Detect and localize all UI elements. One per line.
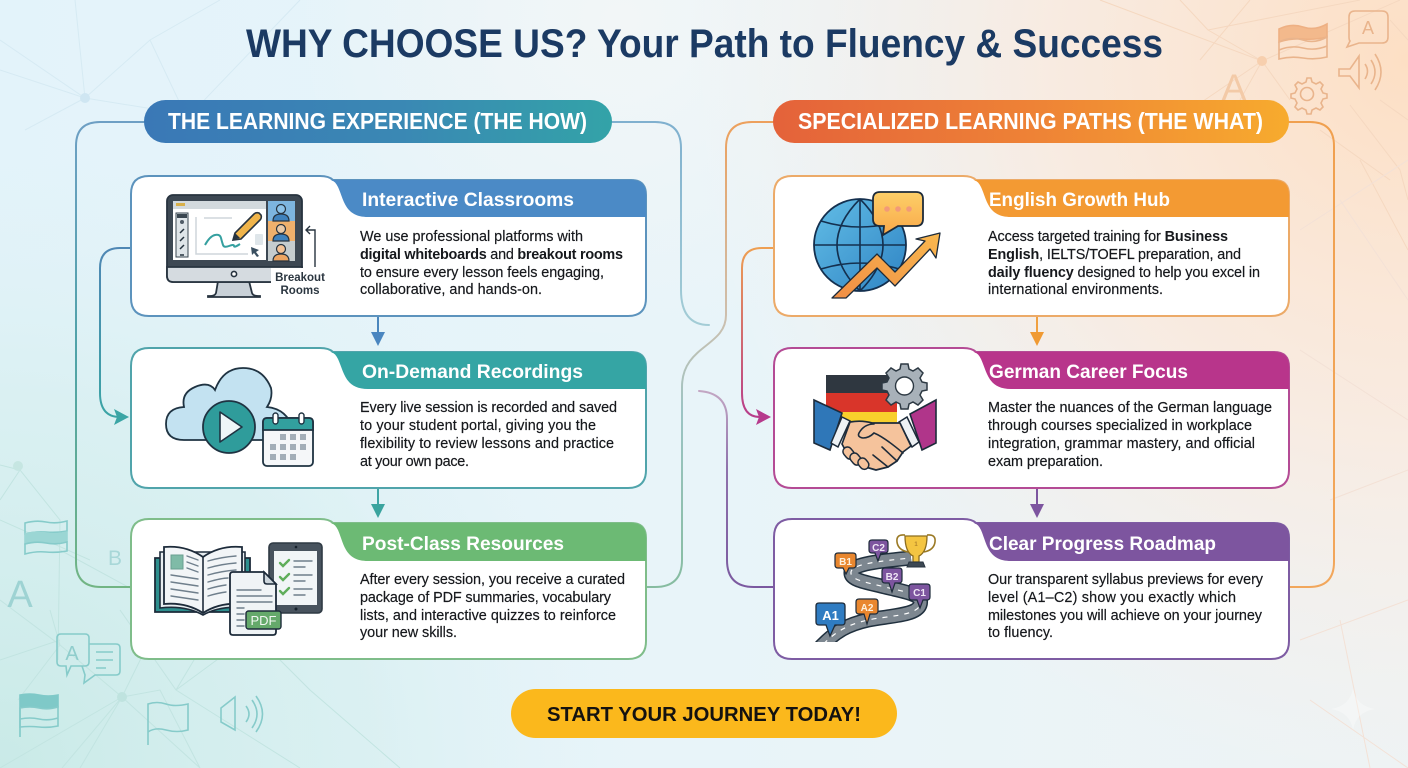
decorative language icons, top right [1222, 11, 1388, 114]
arrow: english hub to german focus [742, 248, 774, 425]
text block: Every live session is recorded and saved [360, 400, 617, 416]
text block: through courses specialized in workplace [988, 418, 1252, 434]
panel: german career focus [774, 348, 1289, 488]
call to action button [511, 689, 897, 738]
icon: winding road with level pins and trophy: C1 [913, 588, 926, 599]
icon: open book, tablet and PDF [155, 543, 322, 635]
icon: winding road with level pins and trophy [805, 535, 935, 657]
text block: Master the nuances of the German language [988, 400, 1272, 416]
icon: open book, tablet and PDF: PDF [250, 613, 277, 628]
arrow: right card 1 down [1030, 316, 1044, 346]
arrow: right card 2 down [1030, 488, 1044, 518]
decorative language icons, top right: A [1362, 18, 1374, 38]
arrow: card 2 down [371, 488, 385, 518]
heading: English Growth Hub [989, 189, 1170, 211]
icon: computer monitor with whiteboard: Breakout [275, 272, 325, 284]
left heading pill: THE LEARNING EXPERIENCE (THE HOW) [168, 108, 587, 134]
text block: your new skills. [360, 625, 457, 641]
icon: winding road with level pins and trophy: A1 [822, 608, 839, 623]
title: WHY CHOOSE US? Your Path to Fluency & Success [246, 22, 1163, 66]
panel: english growth hub [774, 176, 1289, 316]
text block [988, 229, 1260, 298]
icon: winding road with level pins and trophy: B2 [886, 572, 899, 583]
text block [360, 400, 617, 470]
icon: globe, speech bubble and growth arrow [814, 192, 940, 298]
arrow: interactive classrooms to recordings [100, 248, 131, 425]
heading: Post-Class Resources [362, 533, 564, 555]
icon: winding road with level pins and trophy: B1 [839, 557, 852, 568]
text block [360, 229, 623, 298]
text block: international environments. [988, 282, 1163, 298]
decorative language icons, bottom left: A [7, 574, 33, 616]
text block: package of PDF summaries, vocabulary [360, 590, 612, 606]
text block [360, 572, 625, 641]
text block: Our transparent syllabus previews for every [988, 572, 1264, 588]
icon: computer monitor with whiteboard: Rooms [281, 285, 319, 297]
text block: We use professional platforms with [360, 229, 583, 245]
icon: winding road with level pins and trophy: C2 [872, 543, 885, 554]
text block: to fluency. [988, 625, 1053, 641]
decorative language icons, bottom left: B [108, 547, 122, 570]
text block: milestones you will achieve on your journey [988, 608, 1263, 624]
text block [988, 400, 1272, 470]
decorative language icons, bottom left: A [65, 643, 79, 665]
text block: English, IELTS/TOEFL preparation, and [988, 247, 1241, 263]
text block: digital whiteboards and breakout rooms [360, 247, 623, 263]
connector: right outer bracket [1289, 122, 1334, 587]
heading: German Career Focus [989, 361, 1188, 383]
icon: computer monitor with whiteboard [167, 195, 329, 298]
text block: lists, and interactive quizzes to reinforce [360, 608, 616, 624]
call to action button: START YOUR JOURNEY TODAY! [547, 704, 861, 726]
text block: level (A1–C2) show you exactly which [988, 590, 1236, 606]
icon: cloud, play button and calendar [166, 368, 313, 466]
text block: Access targeted training for Business [988, 229, 1228, 245]
panel: on-demand recordings [131, 348, 646, 488]
connector: left pill to centre [612, 122, 709, 325]
panel: interactive classrooms [131, 176, 646, 316]
text block [988, 572, 1264, 641]
icon: German flag, gear and handshake [814, 364, 936, 471]
left heading pill [144, 100, 612, 143]
right heading pill: SPECIALIZED LEARNING PATHS (THE WHAT) [798, 108, 1263, 134]
text block: collaborative, and hands-on. [360, 282, 542, 298]
text block: daily fluency designed to help you excel in [988, 265, 1260, 281]
text block: flexibility to review lessons and practice [360, 436, 614, 452]
heading: Interactive Classrooms [362, 189, 574, 211]
text block: After every session, you receive a curated [360, 572, 625, 588]
text block: exam preparation. [988, 454, 1103, 470]
decorative language icons, bottom left [7, 521, 262, 745]
heading: On-Demand Recordings [362, 361, 583, 383]
icon: winding road with level pins and trophy: A2 [861, 603, 874, 614]
heading: Clear Progress Roadmap [989, 533, 1216, 555]
panel: post-class resources [131, 519, 646, 659]
connector: left outer bracket [76, 122, 144, 587]
text block: integration, grammar mastery, and official [988, 436, 1255, 452]
icon: winding road with level pins and trophy: 1 [914, 542, 918, 548]
text block: at your own pace. [360, 454, 469, 470]
panel: clear progress roadmap [774, 519, 1289, 659]
text block: to your student portal, giving you the [360, 418, 596, 434]
sparkle [1331, 688, 1375, 730]
connector: purple path to roadmap [699, 391, 774, 587]
right heading pill [773, 100, 1289, 143]
decorative language icons, top right: A [1222, 67, 1247, 108]
arrow: card 1 down [371, 316, 385, 346]
connector: right pill to left column [646, 122, 773, 587]
text block: to ensure every lesson feels engaging, [360, 265, 604, 281]
